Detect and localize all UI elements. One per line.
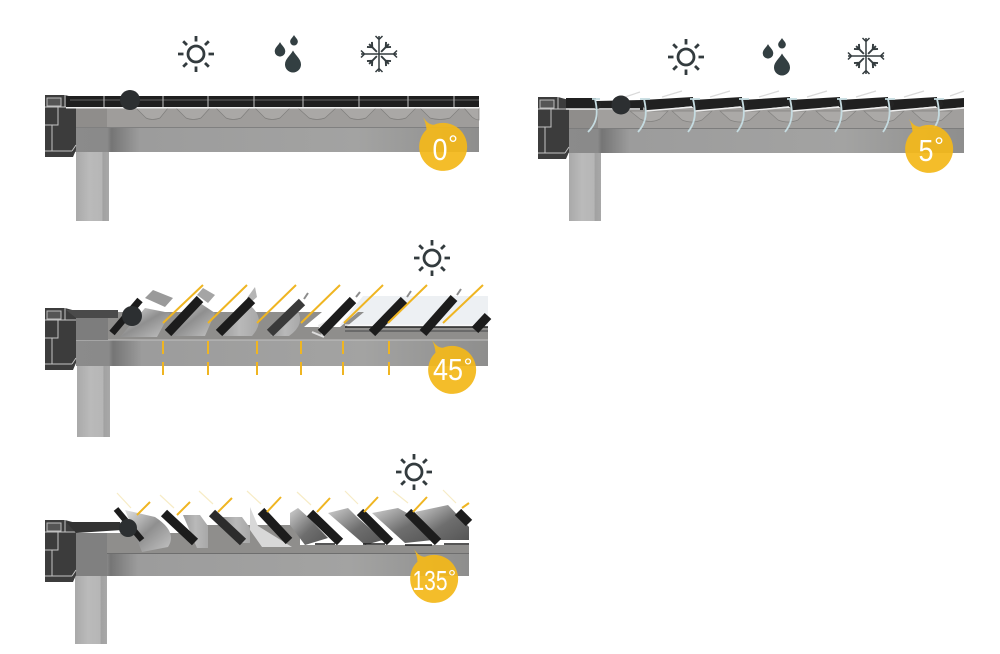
frame section	[45, 520, 76, 582]
badge: 5 degrees: °	[934, 133, 944, 160]
black slats	[112, 298, 488, 333]
badge: 5 degrees	[905, 119, 953, 173]
badge: 0 degrees: 0	[432, 132, 448, 167]
badge: 135 degrees: 135	[412, 565, 448, 596]
slat tips	[304, 289, 461, 299]
badge: 45 degrees: °	[464, 354, 472, 379]
badge: 135 degrees: °	[448, 567, 456, 589]
badge: 0 degrees	[419, 117, 467, 171]
yellow sun rays	[163, 285, 483, 323]
icon: snowflake	[361, 36, 397, 72]
icon: sun	[396, 454, 432, 490]
icon: rain drops	[275, 35, 301, 72]
badge: 45 degrees	[428, 340, 476, 394]
motor	[119, 519, 137, 537]
beam	[75, 107, 479, 152]
beam	[75, 525, 469, 576]
icon: rain drops	[763, 38, 790, 76]
post	[77, 366, 110, 437]
panel: 45 degree	[45, 240, 488, 437]
rails	[312, 325, 488, 337]
closed slats band	[66, 96, 479, 108]
frame section	[45, 95, 76, 157]
motor	[612, 96, 630, 114]
blade fins	[125, 505, 469, 552]
badge: 45 degrees: 45	[433, 352, 463, 387]
icon: snowflake	[848, 38, 884, 74]
icon: sun	[414, 240, 450, 276]
icon: sun	[668, 39, 704, 75]
motor	[122, 306, 142, 326]
frame section	[45, 308, 76, 370]
badge: 0 degrees: °	[448, 131, 458, 158]
glass panels	[340, 296, 488, 325]
panel: 0 degree closed	[45, 35, 479, 221]
post	[76, 152, 109, 221]
badge: 135 degrees	[410, 549, 458, 603]
post	[569, 153, 601, 221]
rails	[315, 544, 469, 545]
beam	[566, 108, 964, 153]
badge: 5 degrees: 5	[918, 133, 934, 168]
icon: sun	[178, 36, 214, 72]
black slats	[116, 509, 469, 542]
yellow dashed lines	[163, 341, 389, 382]
motor	[120, 90, 140, 110]
beam	[76, 312, 488, 366]
frame section	[538, 97, 569, 159]
panel: 135 degree	[45, 454, 469, 644]
blade fins	[120, 287, 344, 337]
yellow sun rays	[137, 497, 469, 515]
faint rays	[117, 490, 456, 508]
panel: 5 degree	[538, 38, 964, 221]
post	[75, 576, 107, 644]
water channels	[588, 99, 944, 132]
tilted slats	[566, 91, 964, 111]
